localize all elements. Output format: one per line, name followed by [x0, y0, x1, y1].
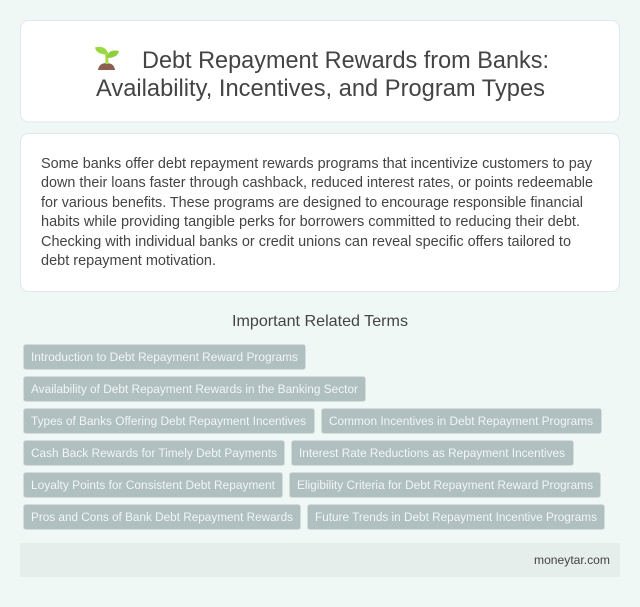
tag: common incentives: [322, 408, 602, 434]
text block: description: down their loans faster through cashback, reduced interest rates, or points redeemable: [41, 175, 593, 191]
text block: description: for various benefits. These programs are designed to encourage responsible financial: [41, 195, 583, 211]
icon: sprout: [95, 47, 119, 70]
tag: future trends: Future Trends in Debt Repayment Incentive Programs: [315, 510, 597, 524]
tag: cash back: [24, 440, 284, 466]
tag: loyalty points: [24, 472, 282, 498]
tag: common incentives: Common Incentives in Debt Repayment Programs: [329, 414, 593, 428]
tag: availability: [24, 376, 366, 402]
footer text: source: moneytar.com: [534, 553, 610, 567]
tag: loyalty points: Loyalty Points for Consistent Debt Repayment: [31, 478, 276, 492]
heading: title: Availability, Incentives, and Program Types: [96, 75, 545, 102]
tag: interest rate: [292, 440, 574, 466]
tag: interest rate: Interest Rate Reductions as Repayment Incentives: [299, 446, 565, 460]
heading: important related terms: Important Related Terms: [232, 313, 408, 330]
tag: eligibility: [290, 472, 600, 498]
tag: availability: Availability of Debt Repayment Rewards in the Banking Sector: [31, 382, 358, 396]
text block: description: Some banks offer debt repayment rewards programs that incentivize customers to pay: [41, 156, 593, 172]
tag: pros and cons: [24, 504, 300, 530]
tag: eligibility: Eligibility Criteria for Debt Repayment Reward Programs: [297, 478, 593, 492]
text block: description: debt repayment motivation.: [41, 253, 216, 269]
tag: types of banks: [24, 408, 314, 434]
panel: description card: [20, 134, 620, 292]
text block: description: habits while providing tangible perks for borrowers committed to reducing their debt.: [41, 214, 580, 230]
text block: description: [41, 156, 593, 269]
tag: introduction: [24, 344, 306, 370]
tag: types of banks: Types of Banks Offering Debt Repayment Incentives: [31, 414, 306, 428]
heading: title: Debt Repayment Rewards from Banks:: [142, 47, 549, 74]
text block: description: Checking with individual banks or credit unions can reveal specific offers tailored to: [41, 234, 571, 250]
footer: [20, 543, 620, 577]
tag: introduction: Introduction to Debt Repayment Reward Programs: [31, 350, 298, 364]
panel: title card: [20, 20, 620, 122]
tag: pros and cons: Pros and Cons of Bank Debt Repayment Rewards: [31, 510, 293, 524]
tag: future trends: [308, 504, 604, 530]
tag list: [24, 344, 604, 530]
heading: title: [96, 47, 549, 102]
tag: cash back: Cash Back Rewards for Timely Debt Payments: [31, 446, 277, 460]
